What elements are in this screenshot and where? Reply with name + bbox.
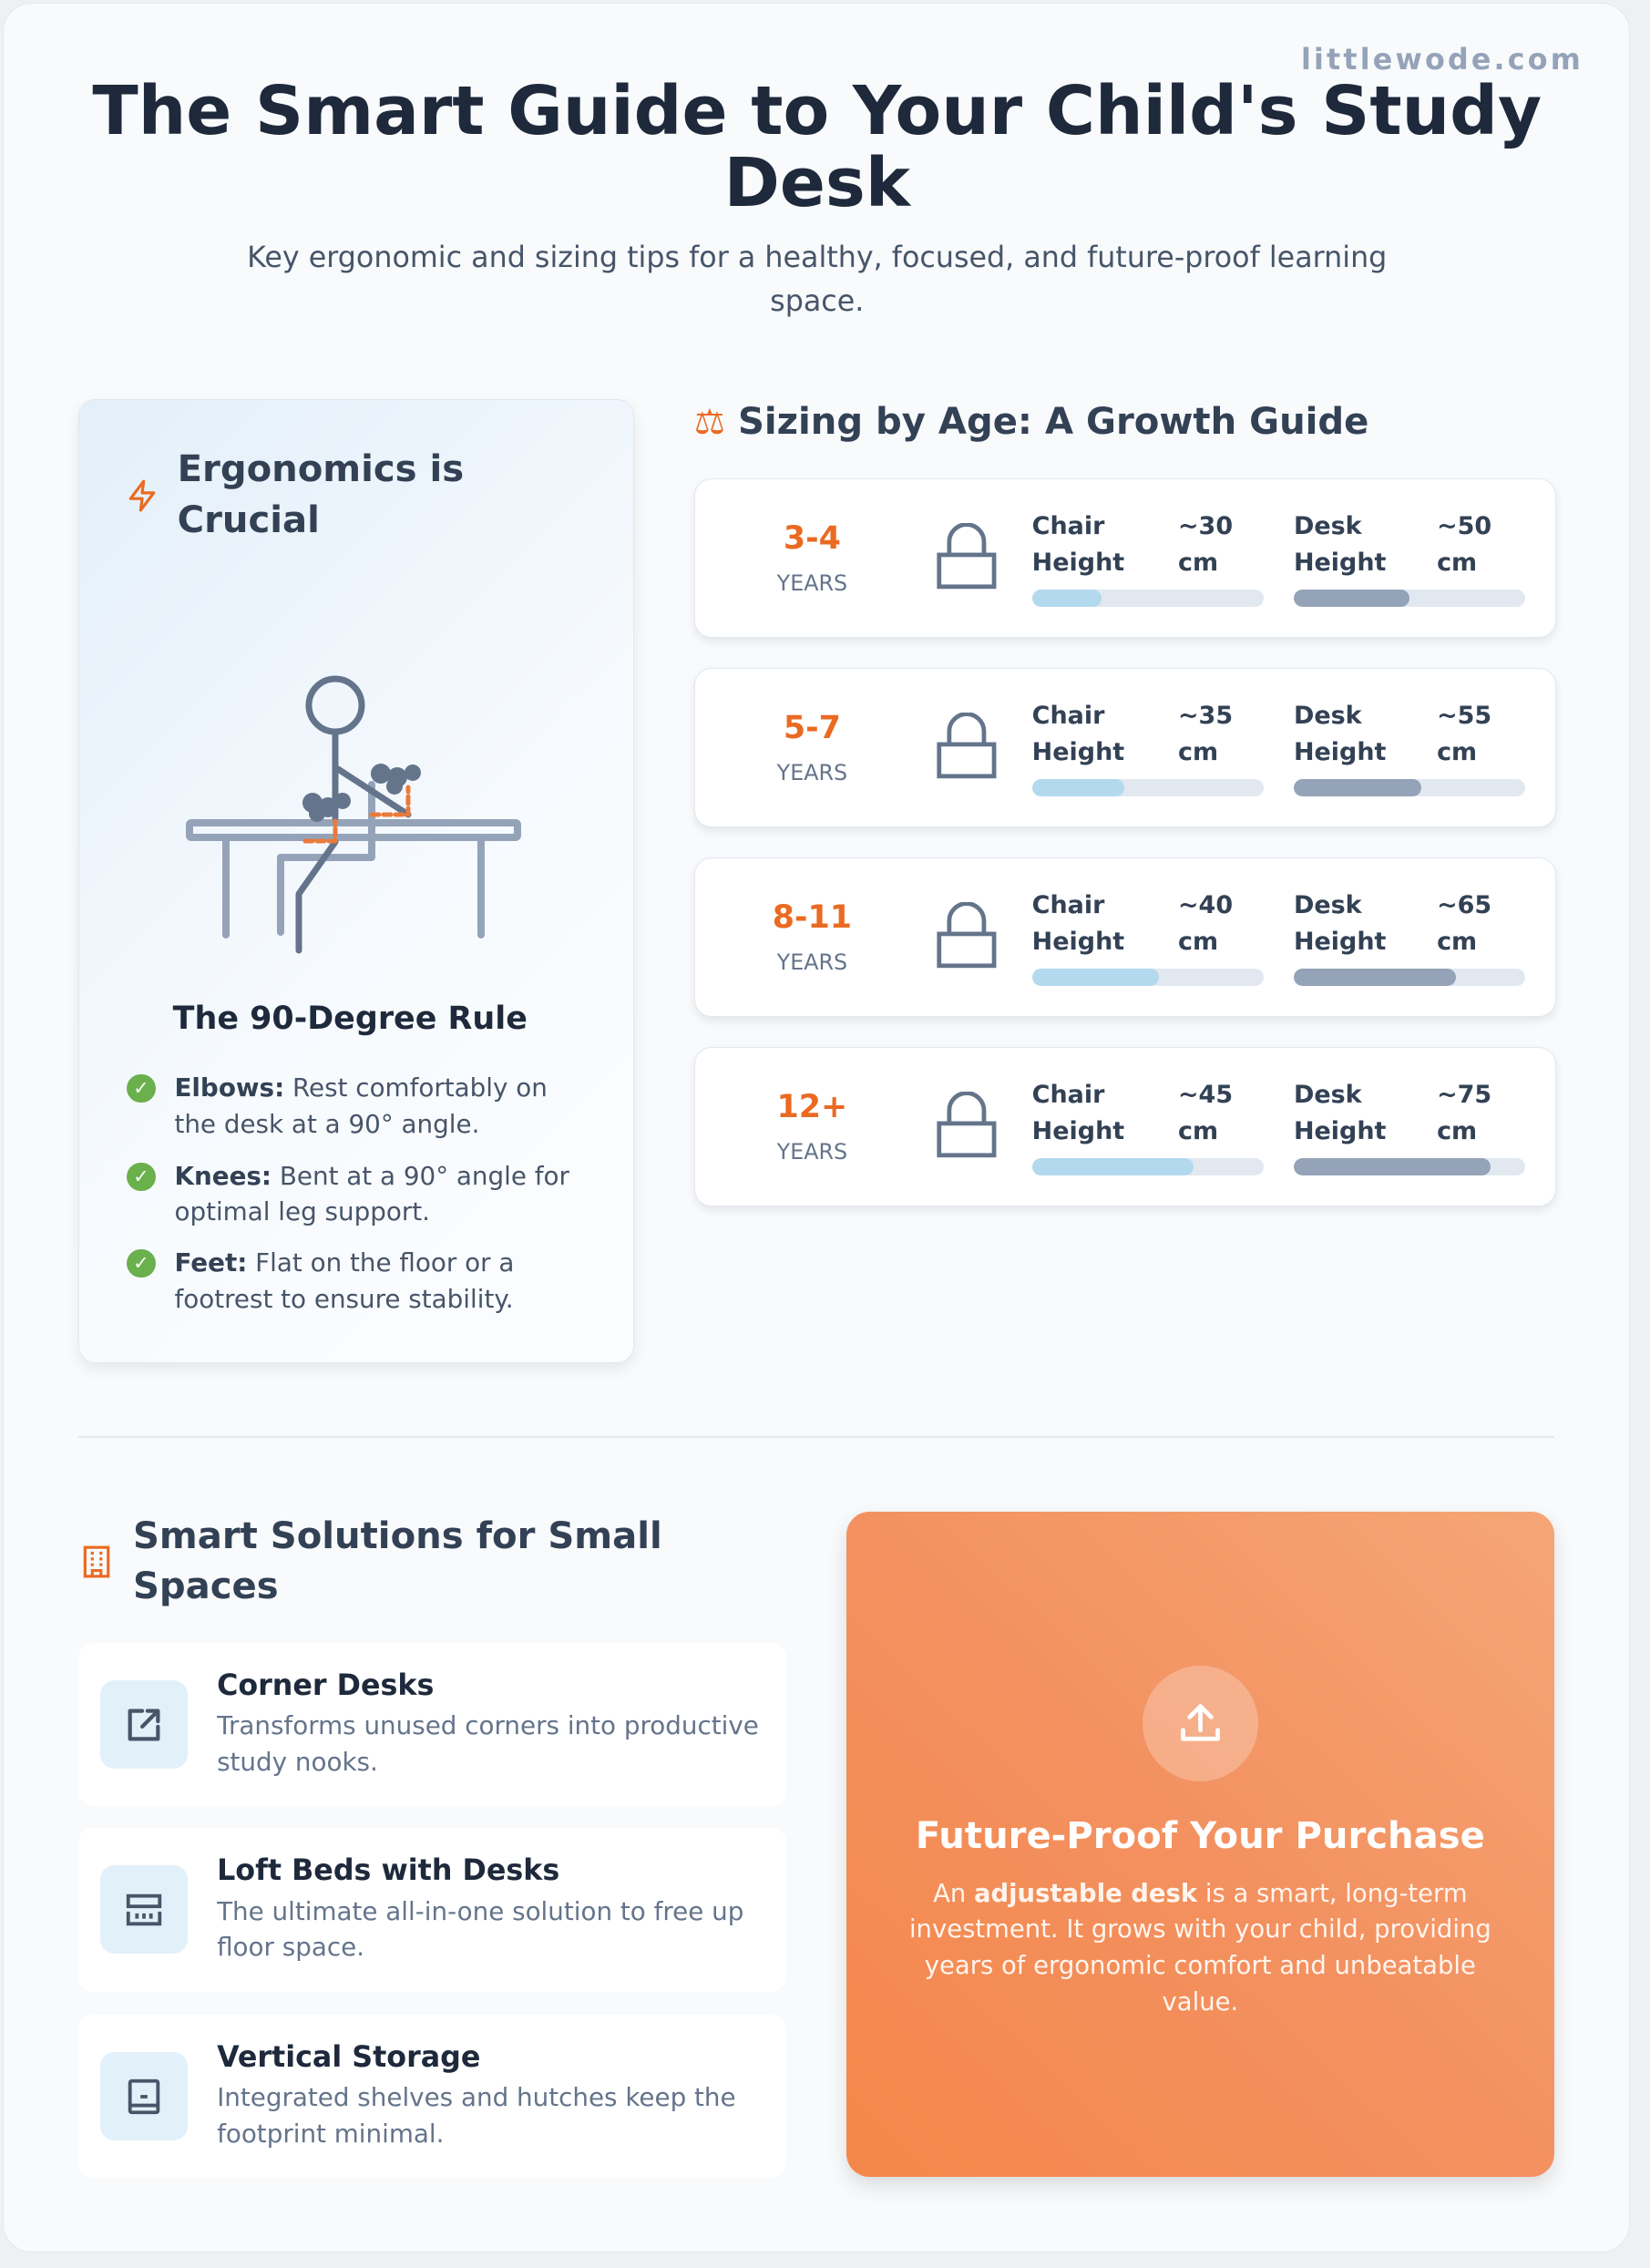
card: 3-4 years: Height — [1294, 549, 1386, 577]
card: 8-11 years: Desk — [1294, 891, 1362, 919]
illustration: child at desk — [186, 676, 521, 953]
card: 12+ years: 12+ — [776, 1089, 847, 1125]
item: loft beds: Loft Beds with Desks — [217, 1854, 559, 1887]
icon: lightning — [129, 479, 155, 512]
card: 5-7 years: Height — [1032, 738, 1124, 766]
icon: building — [84, 1545, 109, 1578]
card: 8-11 years — [694, 857, 1556, 1017]
item: corner desks — [78, 1643, 786, 1806]
card: 5-7 years — [694, 668, 1556, 827]
card: 3-4 years — [694, 478, 1556, 638]
subheading: 90-degree rule: The 90-Degree Rule — [173, 1001, 528, 1037]
card: 5-7 years: cm — [1178, 738, 1218, 766]
bullet: feet: Feet: Flat on the floor or a footrest to ensure stability. — [174, 1247, 514, 1314]
icon: upload — [1143, 1666, 1258, 1781]
callout: future-proof — [845, 1512, 1554, 2177]
card: 3-4 years: YEARS — [777, 570, 847, 596]
item: loft beds: The ultimate all-in-one solution to free up floor space. — [217, 1896, 743, 1962]
icon: loft — [100, 1865, 188, 1954]
card: 8-11 years: Height — [1032, 928, 1124, 956]
panel: ergonomics: ✓ — [133, 1077, 149, 1099]
card: 8-11 years: 8-11 — [773, 899, 852, 936]
card: 12+ years — [694, 1047, 1556, 1206]
subtitle: Key ergonomic and sizing tips for a healthy, focused, and future-proof learning space. — [247, 241, 1387, 318]
card: 5-7 years: Chair — [1032, 702, 1104, 730]
title: The Smart Guide to Your Child's Study Desk — [92, 72, 1542, 222]
heading: ergonomics: Ergonomics is Crucial — [178, 448, 464, 541]
card: 5-7 years: Height — [1294, 738, 1386, 766]
card: 3-4 years: cm — [1178, 549, 1218, 577]
panel: ergonomics — [78, 399, 634, 1363]
card: 5-7 years: 5-7 — [784, 710, 841, 746]
icon: corner — [100, 1680, 188, 1769]
card: 8-11 years: cm — [1178, 928, 1218, 956]
card: 12+ years: YEARS — [777, 1139, 847, 1165]
brand watermark: littlewode.com — [1301, 44, 1583, 77]
card: 5-7 years: cm — [1437, 738, 1477, 766]
item: vertical storage: Vertical Storage — [217, 2041, 480, 2074]
card: 3-4 years: ~50 — [1437, 512, 1491, 540]
card: 3-4 years: cm — [1437, 549, 1477, 577]
heading: sizing by age: ⚖ Sizing by Age: A Growth Guide — [694, 401, 1368, 443]
card: 3-4 years: 3-4 — [784, 520, 841, 557]
card: 5-7 years: ~55 — [1437, 702, 1491, 730]
heading: small spaces: Smart Solutions for Small Spaces — [133, 1515, 662, 1607]
item: vertical storage — [78, 2015, 786, 2178]
callout title: Future-Proof Your Purchase — [916, 1815, 1485, 1857]
card: 12+ years: ~45 — [1178, 1081, 1233, 1109]
item: corner desks: Transforms unused corners into productive study nooks. — [217, 1710, 759, 1777]
card: 5-7 years: Desk — [1294, 702, 1362, 730]
card: 12+ years: Desk — [1294, 1081, 1362, 1109]
card: 5-7 years: YEARS — [777, 760, 847, 785]
card: 12+ years: ~75 — [1437, 1081, 1491, 1109]
panel: ergonomics: ✓ — [133, 1165, 149, 1186]
card: 8-11 years: YEARS — [777, 949, 847, 975]
card: 5-7 years: ~35 — [1178, 702, 1233, 730]
card: 8-11 years: Chair — [1032, 891, 1104, 919]
bullet: knees: Knees: Bent at a 90° angle for optimal leg support. — [174, 1161, 569, 1226]
item: loft beds — [78, 1828, 786, 1992]
icon: storage — [100, 2052, 188, 2140]
card: 3-4 years: ~30 — [1178, 512, 1233, 540]
card: 12+ years: Height — [1294, 1117, 1386, 1145]
card: 8-11 years: Height — [1294, 928, 1386, 956]
item: corner desks: Corner Desks — [217, 1669, 434, 1702]
card: 8-11 years: ~65 — [1437, 891, 1491, 919]
item: vertical storage: Integrated shelves and hutches keep the footprint minimal. — [217, 2082, 736, 2149]
card: 12+ years: Height — [1032, 1117, 1124, 1145]
bullet: elbows: Elbows: Rest comfortably on the desk at a 90° angle. — [174, 1072, 548, 1139]
card: 3-4 years: Chair — [1032, 512, 1104, 540]
card: 12+ years: cm — [1437, 1117, 1477, 1145]
card: 3-4 years: Height — [1032, 549, 1124, 577]
card: 8-11 years: ~40 — [1178, 891, 1233, 919]
card: 12+ years: Chair — [1032, 1081, 1104, 1109]
card: 8-11 years: cm — [1437, 928, 1477, 956]
panel: ergonomics: ✓ — [133, 1252, 149, 1274]
card: 3-4 years: Desk — [1294, 512, 1362, 540]
callout text: An adjustable desk is a smart, long-term investment. It grows with your child, providing years of ergonomic comfort and unbeatable value. — [909, 1880, 1491, 2017]
card: 12+ years: cm — [1178, 1117, 1218, 1145]
